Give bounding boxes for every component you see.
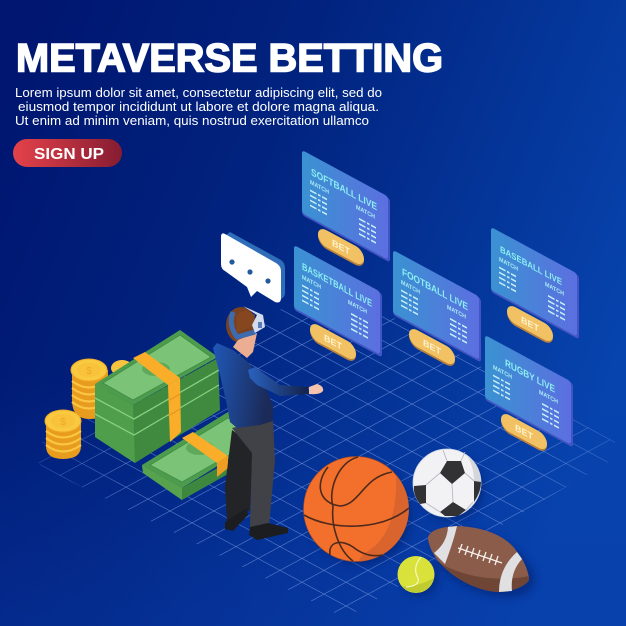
- front coin stack: $: [60, 417, 66, 428]
- isometric floor grid: [38, 309, 615, 612]
- panel: softball live: BET: [332, 238, 350, 258]
- hand: [309, 384, 323, 394]
- front leg: [232, 419, 275, 527]
- small rear coin: [111, 360, 133, 376]
- panel: basketball live: MATCH: [348, 299, 367, 316]
- panel: basketball live: [294, 245, 382, 379]
- ball shadows: [309, 455, 545, 611]
- panel: basketball live: BET: [324, 333, 342, 353]
- panel: baseball live: BASEBALL LIVE: [500, 244, 562, 288]
- body text: Ut enim ad minim veniam, quis nostrud exercitation ullamco: [15, 114, 369, 128]
- icon: large money stack: [95, 330, 220, 463]
- sign up button: [13, 139, 122, 167]
- panel: baseball live: MATCH: [545, 281, 564, 298]
- panel: football live: MATCH: [447, 304, 466, 321]
- title: METAVERSE BETTING: [16, 36, 443, 80]
- icon: coin stacks: [45, 359, 133, 459]
- panel: rugby live: [485, 335, 573, 469]
- sign up button: SIGN UP: [34, 146, 104, 163]
- rear coin stack: $: [86, 366, 92, 377]
- icon: tennis ball: [398, 556, 434, 593]
- body text: [15, 86, 382, 128]
- panel: rugby live: MATCH: [539, 389, 558, 406]
- icon: basketball: [304, 456, 409, 562]
- panel: basketball live: MATCH: [302, 274, 321, 291]
- torso: [213, 343, 273, 428]
- vr visor: [243, 306, 265, 333]
- money band: [133, 352, 181, 442]
- head: [226, 306, 265, 358]
- front shoe: [249, 523, 288, 540]
- panel: softball live: MATCH: [356, 204, 375, 221]
- panel: softball live: [302, 150, 390, 284]
- rear shoe: [225, 508, 248, 531]
- icon: flat money stack: [142, 412, 240, 500]
- figure: man with vr headset: [213, 306, 323, 540]
- panel: rugby live: MATCH: [493, 364, 512, 381]
- rear leg: [225, 430, 253, 522]
- panel: softball live: SOFTBALL LIVE: [311, 166, 377, 213]
- money band: [182, 432, 228, 477]
- panel: football live: [393, 250, 481, 384]
- panel: baseball live: MATCH: [499, 256, 518, 273]
- panel: football live: MATCH: [401, 279, 420, 296]
- icon: soccer ball: [413, 449, 481, 517]
- panel: basketball live: BASKETBALL LIVE: [302, 261, 372, 310]
- panel: baseball live: [491, 227, 579, 361]
- icon: chat bubble: [221, 232, 285, 302]
- panel: football live: BET: [423, 338, 441, 358]
- body text: Lorem ipsum dolor sit amet, consectetur adipiscing elit, sed do: [15, 86, 382, 100]
- body text: eiusmod tempor incididunt ut labore et dolore magna aliqua.: [18, 100, 379, 114]
- icon: american football: [428, 526, 529, 592]
- panel: rugby live: BET: [515, 423, 533, 443]
- panel: football live: FOOTBALL LIVE: [402, 266, 468, 313]
- panel: baseball live: BET: [521, 315, 539, 335]
- panel: rugby live: RUGBY LIVE: [505, 357, 555, 396]
- arm: [248, 367, 308, 396]
- panel: softball live: MATCH: [310, 179, 329, 196]
